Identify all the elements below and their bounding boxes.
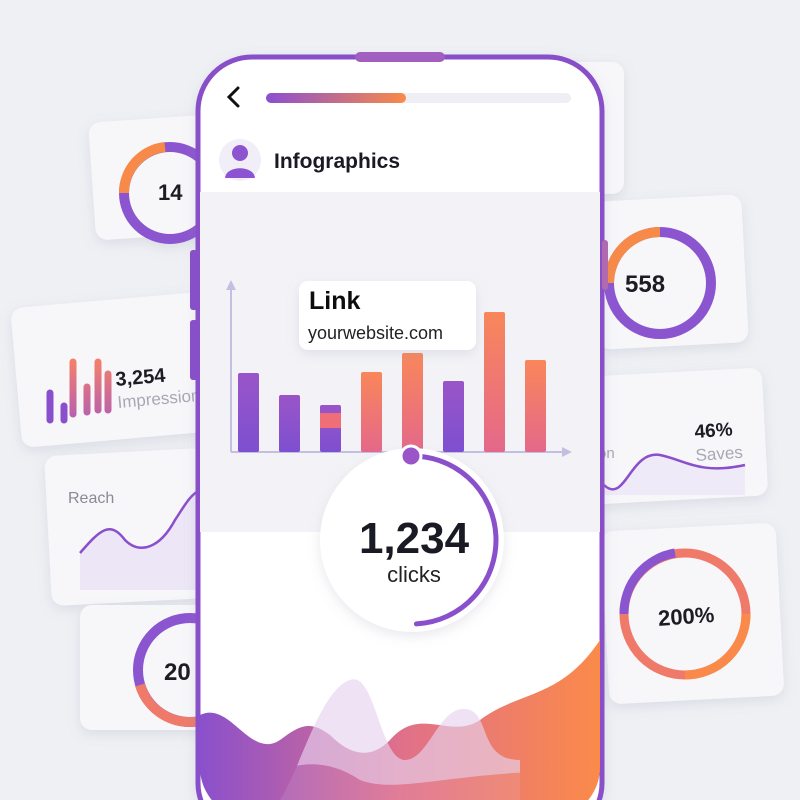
card: impressions: 3,254: [115, 365, 167, 391]
card: 558 donut: 558: [625, 271, 665, 298]
bar chart: [226, 280, 572, 457]
notch bar: [355, 52, 445, 62]
waves: [200, 640, 600, 800]
card: saves: on: [598, 445, 615, 462]
tooltip: link: yourwebsite.com: [308, 323, 443, 343]
card: 558 donut: [591, 194, 749, 350]
clicks circle: clicks: [387, 562, 441, 587]
progress bar: [266, 93, 571, 103]
card: reach: Reach: [68, 490, 114, 507]
clicks circle: 1,234: [359, 514, 470, 563]
card: 20 donut: 20: [164, 659, 191, 686]
tooltip: link: [299, 281, 476, 350]
clicks circle: [320, 446, 504, 632]
card: impressions: [10, 292, 212, 448]
card: 20 donut: [80, 605, 242, 730]
phone side buttons: [190, 250, 198, 310]
tooltip: link: Link: [309, 287, 360, 315]
card: 200% donut: 200%: [657, 602, 715, 631]
back arrow: [229, 88, 238, 106]
card: reach: [44, 448, 212, 606]
header title: Infographics: [274, 150, 400, 173]
avatar: [219, 139, 261, 181]
card: 14 donut: [88, 113, 236, 241]
phone: [190, 52, 608, 800]
card: 14 donut: 14: [158, 180, 183, 205]
card: saves: 46%: [694, 419, 733, 443]
card: saves: Saves: [695, 443, 743, 465]
card: 200% donut: [601, 523, 784, 704]
card: impressions: Impressions: [117, 385, 210, 412]
card: saves: [587, 367, 768, 504]
card: top right behind phone: [560, 62, 624, 194]
